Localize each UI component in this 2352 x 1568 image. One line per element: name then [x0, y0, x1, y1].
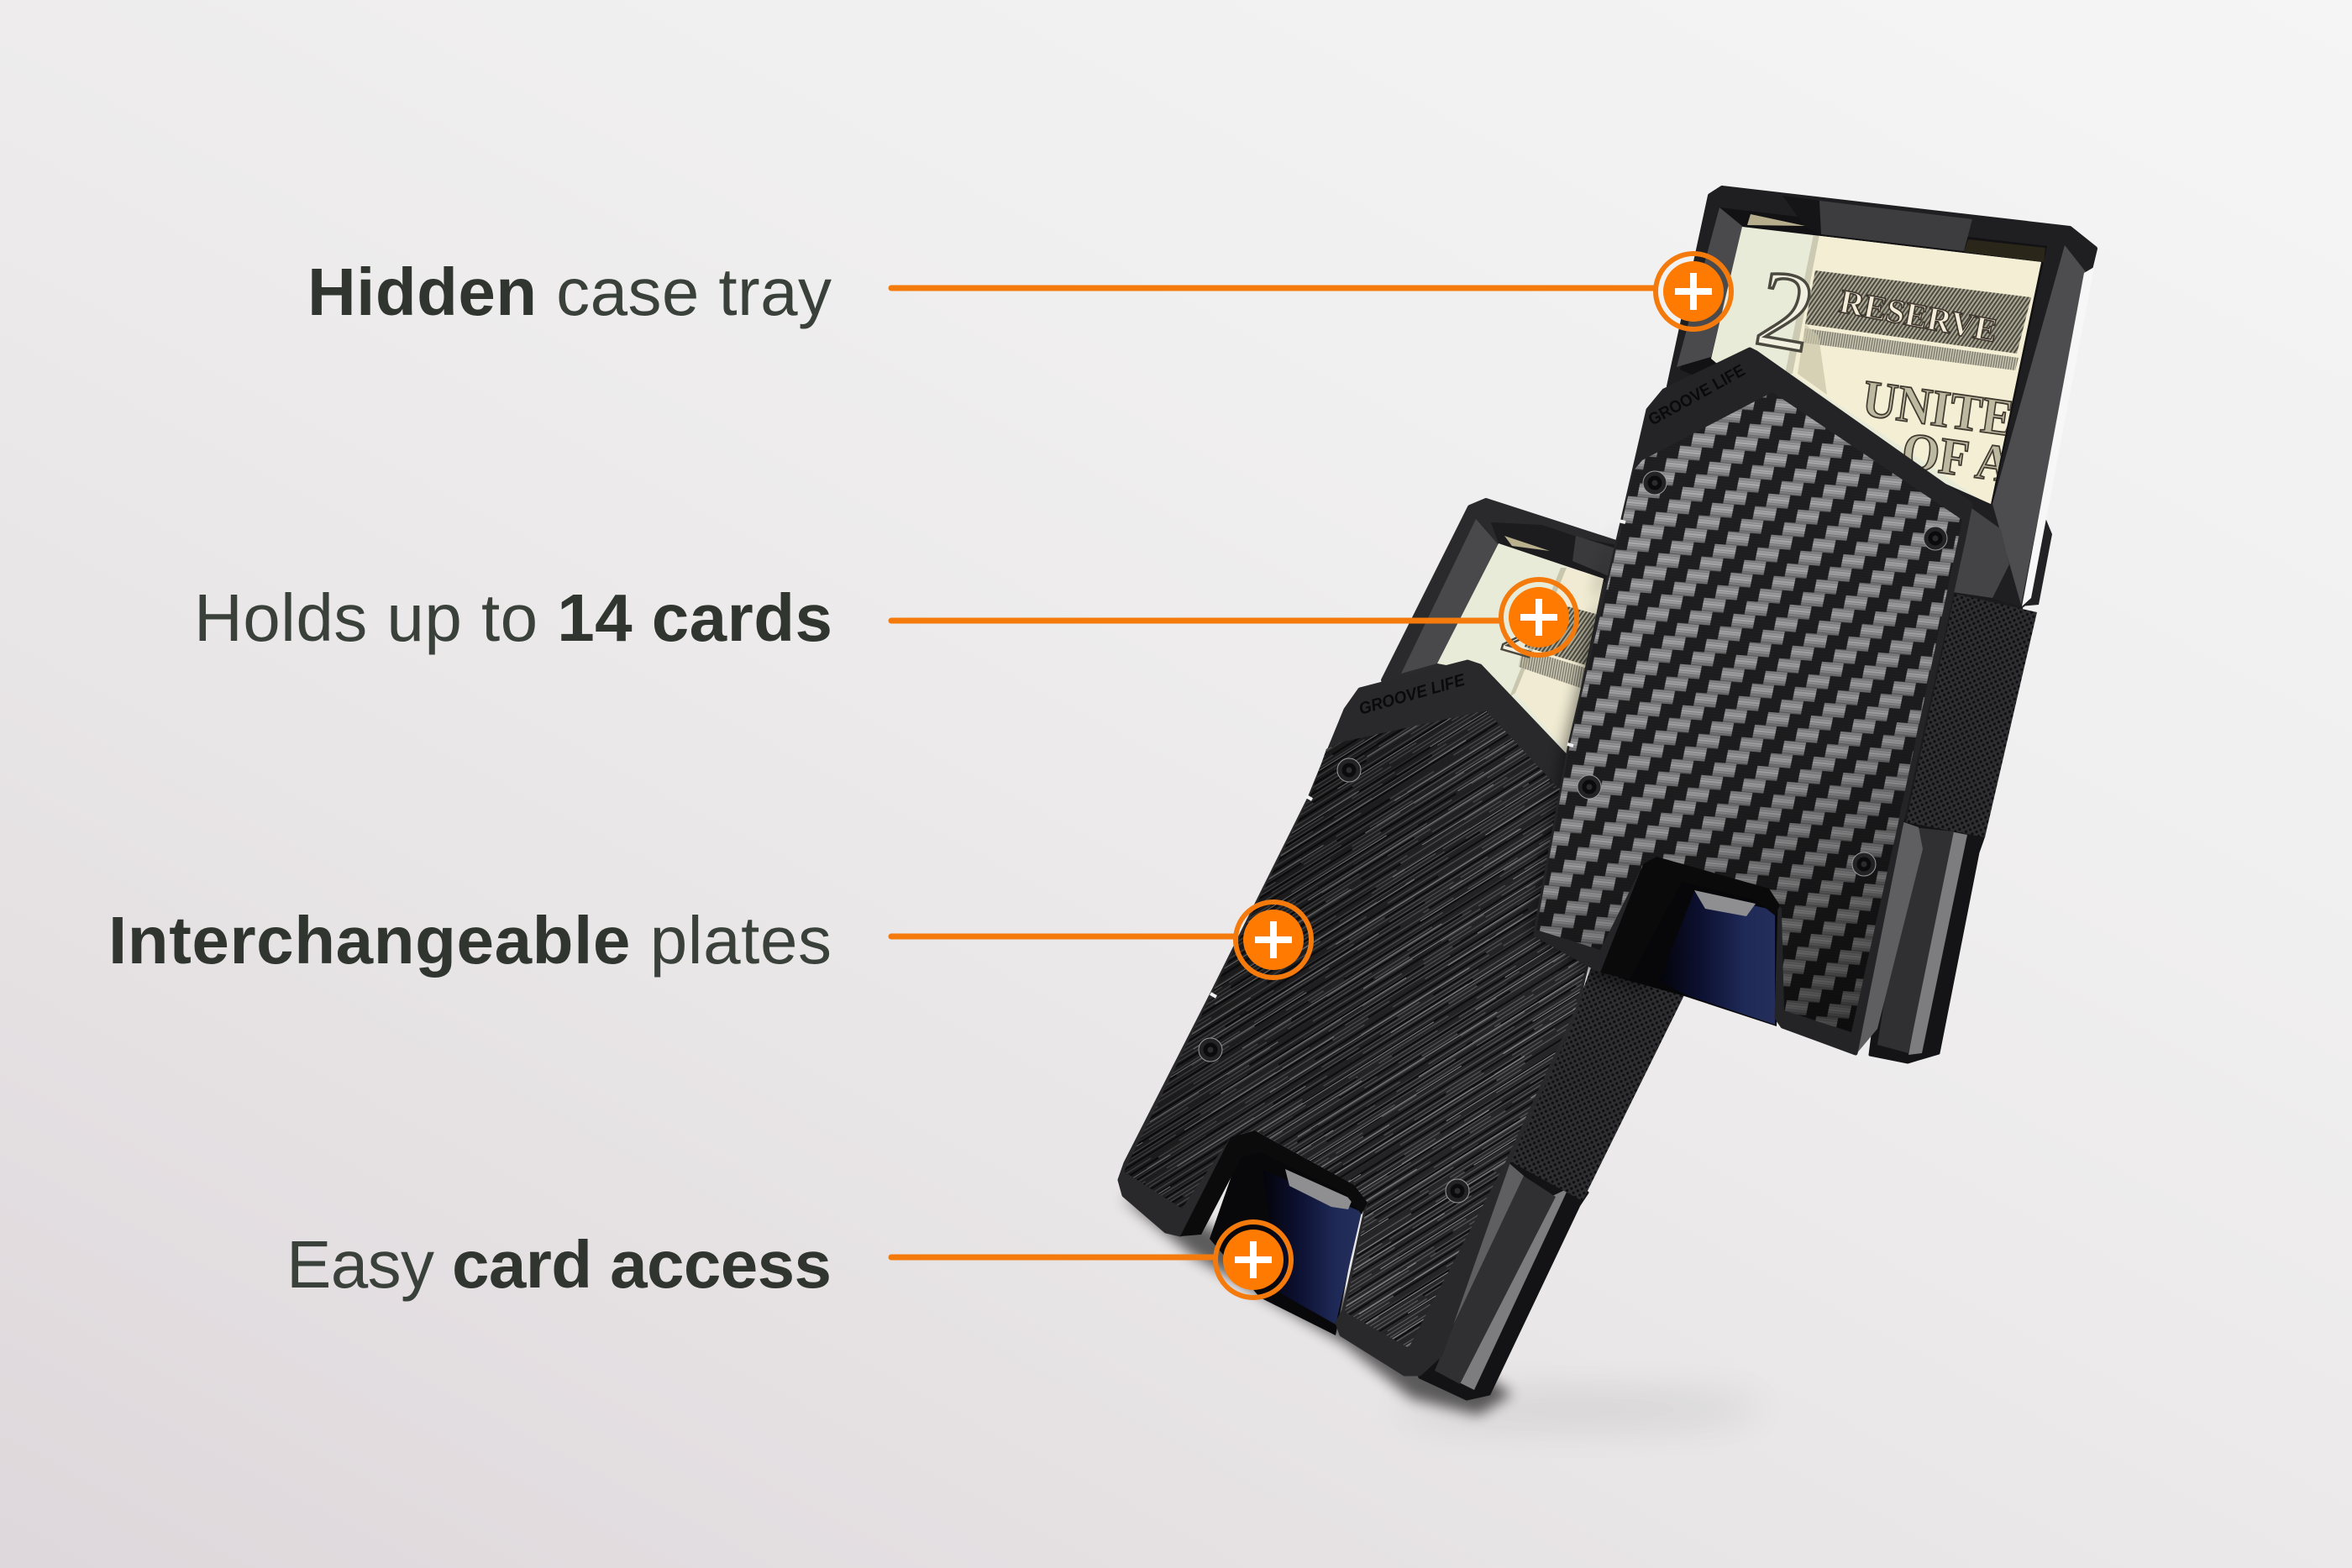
back wallet edge gap	[1567, 521, 1625, 746]
callout: hidden case tray	[891, 254, 1731, 329]
back wallet shadow on front wallet	[1527, 521, 1646, 991]
back wallet bill: OF A	[1898, 422, 2014, 494]
front wallet brushed face	[1124, 711, 1586, 1348]
front wallet notch wall	[1180, 1130, 1368, 1236]
back wallet tray frame	[1669, 188, 2095, 605]
front wallet tray details	[1401, 519, 1621, 674]
back wallet screws	[1578, 471, 1947, 876]
callout: easy card access	[891, 1222, 1291, 1298]
front wallet tray frame	[1383, 501, 1621, 777]
front wallet screws	[1199, 758, 1469, 1203]
back wallet card in notch	[1621, 857, 1781, 1026]
front wallet logo: GROOVE LIFE	[1357, 671, 1467, 719]
back wallet notch wall	[1600, 857, 1780, 979]
front wallet: brushed plate	[1092, 501, 1697, 1399]
front wallet edge gaps	[1210, 796, 1312, 997]
front wallet card in notch	[1210, 1142, 1362, 1335]
callout: interchangeable plates	[891, 902, 1311, 978]
back wallet bill: RESERVE	[1836, 282, 2000, 349]
front wallet plate rim	[1120, 662, 1596, 1374]
back wallet side layers	[1851, 504, 2009, 1062]
back wallet logo: GROOVE LIFE	[1646, 361, 1748, 429]
back wallet tab and side strip	[1900, 504, 2052, 831]
back wallet bill	[1711, 227, 2041, 504]
front wallet bill	[1437, 543, 1604, 753]
front wallet elastic band	[1509, 966, 1697, 1201]
callout: holds up to 14 cards	[891, 579, 1577, 655]
front wallet bill: 2	[1494, 589, 1550, 674]
back wallet: carbon plate	[1536, 188, 2095, 1062]
label: Interchangeable plates: Interchangeable plates	[108, 903, 832, 978]
label: Holds up to 14 cards: Holds up to 14 cards	[194, 580, 832, 655]
ground shadow	[1121, 1197, 1764, 1424]
back wallet bill: 2	[1748, 245, 1824, 376]
front wallet side layers	[1410, 1151, 1588, 1399]
back wallet elastic band	[1906, 594, 2037, 837]
label: Easy card access: Easy card access	[286, 1227, 832, 1302]
back wallet carbon face	[1536, 392, 1962, 1032]
label: Hidden case tray: Hidden case tray	[307, 254, 832, 329]
back wallet bill: UNITED	[1859, 370, 2051, 453]
back wallet plate rim	[1536, 349, 1971, 1053]
back wallet tray details	[1677, 196, 2094, 606]
